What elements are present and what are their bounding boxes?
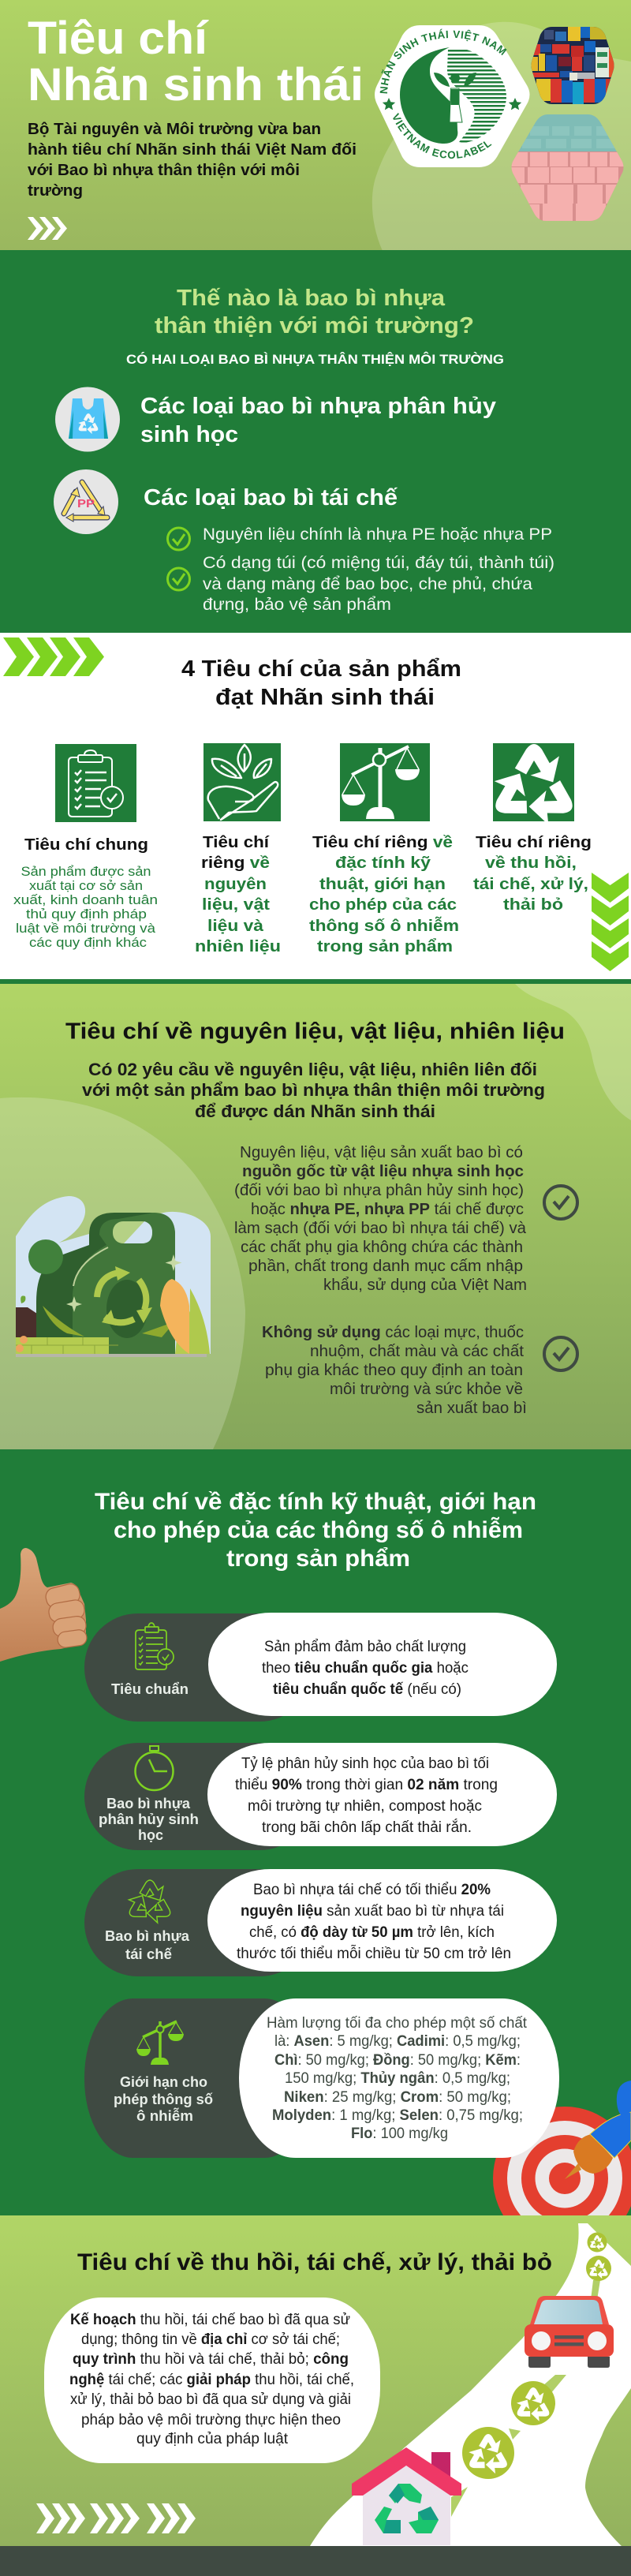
text: technical criteria: thông số ô nhiễm xyxy=(309,916,459,935)
text: thước tối thiểu mỗi chiều từ 50 cm trở lên xyxy=(237,1945,511,1962)
icon: recycle tile xyxy=(484,743,581,831)
text block xyxy=(44,2297,380,2463)
text: general criteria: các quy định khác xyxy=(29,935,147,950)
text block: quy định của pháp luật xyxy=(136,2430,289,2447)
icon: Vietnam ecolabel logo: VIETNAM ECOLABEL xyxy=(393,112,492,159)
text: môi trường tự nhiên, compost hoặc xyxy=(248,1798,482,1815)
icon: right chevrons xyxy=(3,637,104,676)
icon: target with dart xyxy=(493,2081,631,2250)
label xyxy=(99,1796,199,1843)
text: raw materials criteria: nhiên liệu xyxy=(195,938,281,955)
list: recycled packaging properties: và dạng màng để bao bọc, che phủ, chứa xyxy=(203,574,532,593)
text: Tỷ lệ phân hủy sinh học của bao bì tối xyxy=(241,1755,489,1772)
icon: thumbs up hand xyxy=(0,1548,88,1662)
text: technical criteria: cho phép của các xyxy=(309,896,457,914)
text: recovery criteria: thải bỏ xyxy=(503,896,563,914)
subheading: Có 02 yêu cầu về nguyên liệu, vật liệu, nhiên liên đối xyxy=(88,1060,537,1079)
intro text: với Bao bì nhựa thân thiện với môi xyxy=(28,162,300,179)
text: requirement one: phần, chất trong danh mục cấm nhập xyxy=(248,1258,523,1275)
text: recovery criteria xyxy=(473,834,592,914)
panel: raw materials xyxy=(0,984,631,1449)
icon: Vietnam ecolabel logo xyxy=(375,25,530,167)
heading: cho phép của các thông số ô nhiễm xyxy=(114,1516,523,1543)
heading: trong sản phẩm xyxy=(226,1546,410,1572)
text block: quy trình thu hồi và tái chế, thải bỏ; công xyxy=(73,2350,349,2368)
text: requirement one: làm sạch (đối với bao bì nhựa tái chế) và xyxy=(234,1220,527,1237)
label: phân hủy sinh xyxy=(99,1811,199,1827)
list: recycled packaging properties xyxy=(203,525,554,614)
text: general criteria: Sản phẩm được sản xyxy=(21,864,151,879)
text: thiểu 90% trong thời gian 02 năm trong xyxy=(235,1777,498,1793)
heading: Tiêu chí về đặc tính kỹ thuật, giới hạn xyxy=(95,1489,536,1515)
text: technical criteria: thuật, giới hạn xyxy=(319,876,446,893)
label: phép thông số xyxy=(114,2092,213,2107)
heading: thân thiện với môi trường? xyxy=(155,313,474,338)
heading: Tiêu chí về thu hồi, tái chế, xử lý, thải bỏ xyxy=(77,2249,552,2275)
text: general criteria: xuất tại cơ sở sản xyxy=(29,878,143,893)
text: requirement two: phụ gia khác theo quy định an toàn xyxy=(265,1362,523,1379)
label: biodegradable: Các loại bao bì nhựa phân hủy xyxy=(140,394,496,419)
icon: car xyxy=(525,2296,614,2368)
text: raw materials criteria: Tiêu chí xyxy=(203,834,271,851)
text: Molyden: 1 mg/kg; Selen: 0,75 mg/kg; xyxy=(272,2107,523,2124)
text: Flo: 100 mg/kg xyxy=(351,2125,448,2142)
icon: bottom chevrons xyxy=(36,2503,196,2533)
text: general criteria: thủ quy định pháp xyxy=(26,907,147,922)
image: stadium seats xyxy=(509,113,627,222)
label: biodegradable xyxy=(140,394,496,447)
text block: dụng; thông tin về địa chỉ cơ sở tái chế; xyxy=(81,2331,340,2348)
illustration: road xyxy=(310,2223,631,2546)
text xyxy=(237,1882,511,1962)
text: requirement one: khẩu, sử dụng của Việt Nam xyxy=(323,1277,527,1294)
icon: Vietnam ecolabel logo: NHÃN SINH THÁI VIỆT NAM xyxy=(380,28,506,93)
icon: down chevrons xyxy=(592,873,629,971)
icon: scales xyxy=(136,2021,184,2065)
icon: recycled PP triangle: PP xyxy=(77,497,95,510)
text: raw materials criteria: riêng về xyxy=(201,854,270,872)
icon: check 1 xyxy=(167,528,189,550)
intro text: trường xyxy=(28,182,83,200)
text: recovery criteria: về thu hồi, xyxy=(485,854,577,872)
card: pollutant limits xyxy=(84,1998,559,2158)
panel: recovery and disposal xyxy=(0,2215,631,2546)
list: recycled packaging properties: đựng, bảo vệ sản phẩm xyxy=(203,595,391,614)
text: Chì: 50 mg/kg; Đồng: 50 mg/kg; Kẽm: xyxy=(274,2052,521,2069)
text: requirement one xyxy=(234,1144,527,1294)
text: technical criteria xyxy=(309,834,459,955)
text: raw materials criteria: liệu, vật xyxy=(202,896,270,914)
label: Tiêu chuẩn xyxy=(111,1681,189,1697)
intro text: hành tiêu chí Nhãn sinh thái Việt Nam đối xyxy=(28,141,357,159)
text: requirement one: (đối với bao bì nhựa phân hủy sinh học) xyxy=(234,1182,524,1199)
panel: what is eco-friendly plastic packaging xyxy=(0,250,631,633)
heading: 4 Tiêu chí của sản phẩm xyxy=(181,656,461,682)
image: stacked plastic crates xyxy=(532,27,614,104)
panel: four criteria xyxy=(0,633,631,984)
text: Sản phẩm đảm bảo chất lượng xyxy=(264,1639,466,1655)
icon: clipboard tile xyxy=(55,744,136,822)
text block: xử lý, thải bỏ bao bì đã qua sử dụng và giải xyxy=(70,2391,351,2408)
label: học xyxy=(138,1827,163,1843)
icon: check 2 xyxy=(167,568,189,590)
intro text: Bộ Tài nguyên và Môi trường vừa ban xyxy=(28,121,321,138)
text xyxy=(267,2015,528,2142)
text: requirement two: Không sử dụng các loại mực, thuốc xyxy=(262,1324,524,1341)
heading: đạt Nhãn sinh thái xyxy=(215,685,435,710)
label: biodegradable: sinh học xyxy=(140,422,238,447)
text: general criteria: xuất, kinh doanh tuân xyxy=(13,892,158,907)
text: general criteria: luật về môi trường và xyxy=(16,921,156,936)
icon: check requirement one xyxy=(544,1186,577,1219)
text: trong bãi chôn lấp chất thải rắn. xyxy=(262,1819,472,1836)
icon: header chevrons xyxy=(28,217,67,240)
text: requirement two xyxy=(262,1324,527,1417)
panel: technical characteristics xyxy=(0,1449,631,2250)
text: requirement one: các chất phụ gia không chứa các thành xyxy=(241,1239,523,1256)
icon: house with recycling sign xyxy=(352,2447,461,2545)
text: requirement one: nguồn gốc từ vật liệu nhựa sinh học xyxy=(242,1163,524,1180)
text: requirement one: hoặc nhựa PE, nhựa PP tái chế được xyxy=(251,1201,524,1218)
title xyxy=(28,13,364,110)
text: theo tiêu chuẩn quốc gia hoặc xyxy=(262,1660,469,1677)
heading xyxy=(95,1489,536,1572)
text: requirement two: sản xuất bao bì xyxy=(416,1400,527,1417)
text: technical criteria: Tiêu chí riêng về xyxy=(312,834,453,851)
text block: nghệ tái chế; các giải pháp thu hồi, tái chế, xyxy=(69,2371,354,2388)
text: 150 mg/kg; Thủy ngân: 0,5 mg/kg; xyxy=(285,2070,510,2087)
text: chế, có độ dày từ 50 µm trở lên, kích xyxy=(249,1924,495,1941)
text: Niken: 25 mg/kg; Crom: 50 mg/kg; xyxy=(284,2089,511,2106)
text xyxy=(262,1639,469,1698)
card: standards xyxy=(84,1613,557,1722)
subheading xyxy=(82,1060,545,1121)
text block: pháp bảo vệ môi trường thực hiện theo xyxy=(81,2411,341,2428)
text: raw materials criteria: liệu và xyxy=(207,918,264,935)
footer bar xyxy=(0,2546,631,2576)
label: Bao bì nhựa xyxy=(105,1928,190,1944)
text: technical criteria: trong sản phẩm xyxy=(317,938,453,955)
title: Tiêu chí xyxy=(28,13,209,64)
text: raw materials criteria xyxy=(195,834,281,955)
icon: recycled PP triangle xyxy=(54,469,118,534)
text xyxy=(235,1755,498,1836)
subheading: CÓ HAI LOẠI BAO BÌ NHỰA THÂN THIỆN MÔI TRƯỜNG xyxy=(126,352,504,367)
label: tái chế xyxy=(125,1946,173,1962)
text: requirement one: Nguyên liệu, vật liệu sản xuất bao bì có xyxy=(240,1144,523,1161)
illustration: plastic canister with corn xyxy=(16,1196,211,1357)
subheading: với một sản phẩm bao bì nhựa thân thiện môi trường xyxy=(82,1080,545,1100)
label: recycled packaging: Các loại bao bì tái chế xyxy=(144,485,398,510)
icon: clipboard outline xyxy=(136,1623,174,1669)
text: raw materials criteria: nguyên xyxy=(204,876,267,893)
icon: check requirement two xyxy=(544,1337,577,1370)
card: recycled xyxy=(84,1869,557,1976)
icon: stopwatch xyxy=(136,1746,174,1790)
text: technical criteria: đặc tính kỹ xyxy=(335,854,431,872)
icon: scales tile xyxy=(340,743,430,821)
heading xyxy=(155,286,474,338)
heading: Tiêu chí về nguyên liệu, vật liệu, nhiên liệu xyxy=(65,1019,565,1045)
intro text xyxy=(28,121,357,200)
subheading: để được dán Nhãn sinh thái xyxy=(195,1101,435,1121)
panel: header xyxy=(0,0,631,250)
card: biodegradable xyxy=(84,1743,557,1850)
text: Bao bì nhựa tái chế có tối thiểu 20% xyxy=(253,1882,491,1898)
icon: biodegradable bag xyxy=(55,387,120,451)
heading: Thế nào là bao bì nhựa xyxy=(177,286,446,311)
text: nguyên liệu sản xuất bao bì từ nhựa tái xyxy=(241,1903,504,1920)
icon: recycle outline xyxy=(123,1880,174,1926)
label: Giới hạn cho xyxy=(120,2074,207,2090)
label xyxy=(114,2074,213,2124)
list: recycled packaging properties: Có dạng túi (có miệng túi, đáy túi, thành túi) xyxy=(203,553,554,572)
list: recycled packaging properties: Nguyên liệu chính là nhựa PE hoặc nhựa PP xyxy=(203,525,552,544)
icon: recycling circles on road xyxy=(462,2233,611,2479)
text: Hàm lượng tối đa cho phép một số chất xyxy=(267,2015,528,2032)
label: ô nhiễm xyxy=(136,2107,193,2124)
text block: Kế hoạch thu hồi, tái chế bao bì đã qua sử xyxy=(70,2311,350,2328)
text: recovery criteria: Tiêu chí riêng xyxy=(476,834,592,851)
text: requirement two: môi trường và sức khỏe về xyxy=(330,1381,523,1398)
text: là: Asen: 5 mg/kg; Cadimi: 0,5 mg/kg; xyxy=(274,2033,521,2050)
text: tiêu chuẩn quốc tế (nếu có) xyxy=(273,1681,461,1698)
text: recovery criteria: tái chế, xử lý, xyxy=(473,876,588,893)
title: Nhãn sinh thái xyxy=(28,59,364,110)
text: requirement two: nhuộm, chất màu và các chất xyxy=(310,1343,524,1360)
text: general criteria: Tiêu chí chung xyxy=(24,836,148,854)
label xyxy=(105,1928,190,1962)
heading xyxy=(181,656,461,710)
text: general criteria xyxy=(13,836,158,950)
label: Bao bì nhựa xyxy=(106,1796,191,1811)
icon: hand with leaves tile xyxy=(203,743,281,821)
